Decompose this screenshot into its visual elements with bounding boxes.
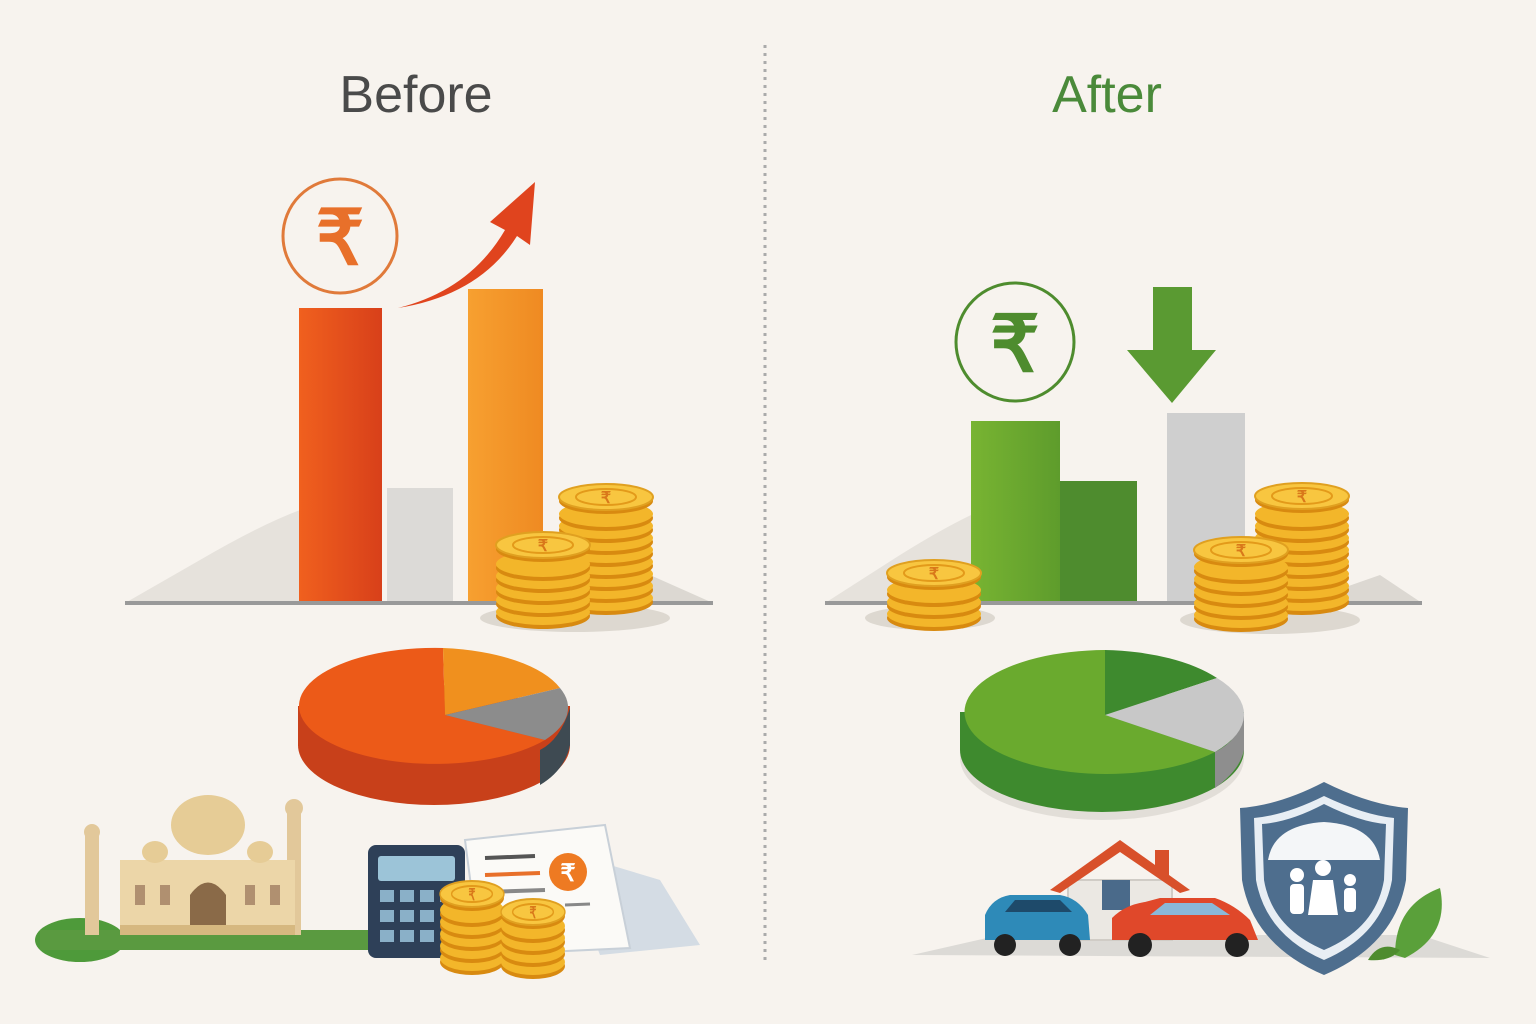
- pie chart before: [298, 648, 570, 805]
- bar chart: before: [125, 289, 713, 603]
- coins before: [480, 484, 670, 632]
- icon: shield with family: [1240, 782, 1408, 975]
- icon: tax document: [465, 825, 700, 955]
- icon: tax document: ₹: [560, 860, 576, 887]
- icon: leaf: [1368, 888, 1442, 960]
- arrow: down: [1127, 287, 1216, 403]
- icon: calculator: [368, 845, 465, 958]
- title: After: After: [1052, 66, 1162, 124]
- coins after: [865, 483, 1360, 634]
- arrow: rising: [398, 182, 535, 308]
- illustration: house and cars: [912, 840, 1490, 958]
- icon: rupee circle before: [283, 179, 397, 293]
- title: Before: Before: [339, 66, 493, 124]
- pie chart after: [960, 650, 1244, 820]
- icon: rupee circle after: ₹: [990, 300, 1040, 388]
- icon: rupee circle before: ₹: [316, 196, 364, 281]
- icon: rupee circle after: [956, 283, 1074, 401]
- coins: bottom left: [440, 881, 565, 979]
- illustration: Taj Mahal: [35, 795, 370, 962]
- bar chart: after: [825, 413, 1422, 603]
